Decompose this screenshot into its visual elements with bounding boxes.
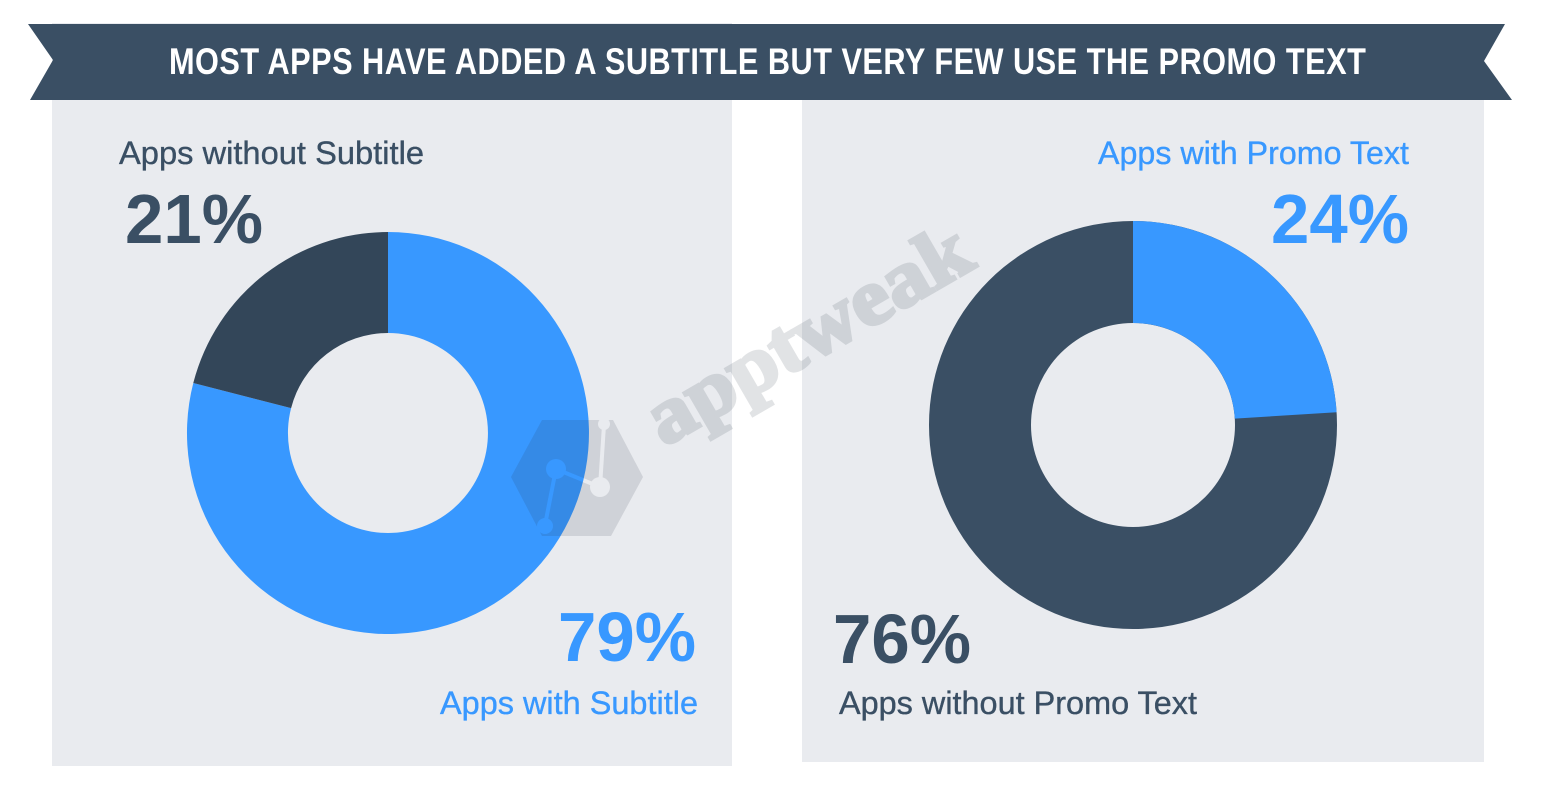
value: 24%: 24% [1271,180,1409,258]
watermark wordmark: apptweak [629,205,987,463]
icon: hexagon network [511,420,643,536]
title ribbon [28,24,1512,100]
label: apps without promo text: Apps without Promo Text [839,685,1197,721]
value: 79%: 79% [558,598,696,676]
panel: promo text [802,60,1484,762]
donut chart: subtitle [187,232,589,634]
watermark: apptweak logo [511,205,987,536]
label: apps with promo text: Apps with Promo Text [1098,135,1409,171]
label: apps without subtitle: Apps without Subtitle [119,135,424,171]
panel: subtitle [52,23,732,766]
title: MOST APPS HAVE ADDED A SUBTITLE BUT VERY FEW USE THE PROMO TEXT [169,41,1366,83]
value: 76%: 76% [833,600,971,678]
donut chart: promo text [929,221,1337,629]
label: apps with subtitle: Apps with Subtitle [440,685,698,721]
value: 21%: 21% [125,180,263,258]
